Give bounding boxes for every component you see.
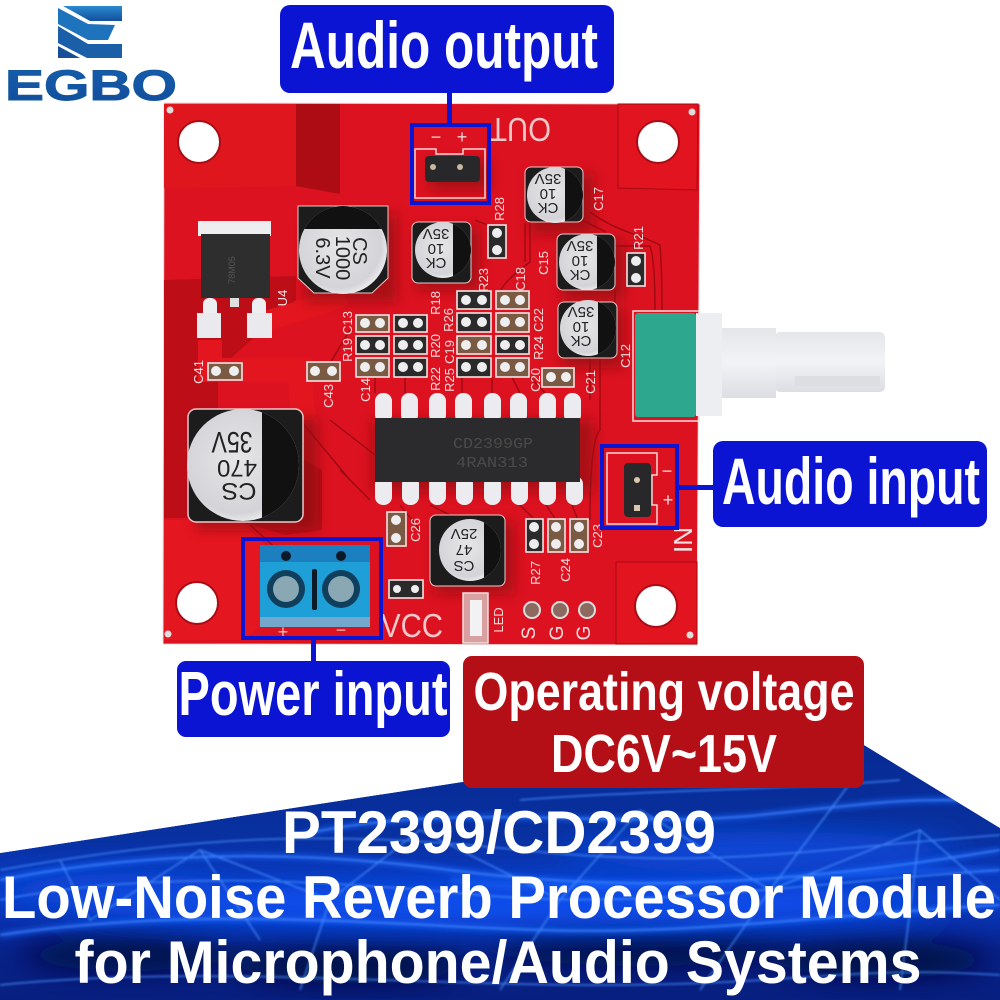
component: capacitor C17: 10 bbox=[540, 185, 556, 202]
mounting holes bbox=[176, 121, 679, 627]
callout: audio input bbox=[602, 441, 987, 528]
component: voltage regulator U4: 78M05 bbox=[227, 256, 237, 284]
silkscreen labels: C14 bbox=[358, 378, 373, 402]
silkscreen labels: − bbox=[662, 461, 672, 481]
component: capacitor CS 47 25V: 25V bbox=[451, 525, 477, 542]
title bbox=[2, 799, 996, 996]
silkscreen labels: C23 bbox=[590, 524, 605, 548]
silkscreen labels: C22 bbox=[531, 308, 546, 332]
silkscreen labels: C24 bbox=[558, 558, 573, 582]
callout: audio output bbox=[280, 5, 614, 203]
component shadows bbox=[196, 160, 624, 594]
silkscreen labels: − bbox=[336, 620, 346, 640]
callout: power input bbox=[177, 539, 450, 737]
silkscreen labels: + bbox=[278, 622, 288, 642]
component: capacitor C12: 35V bbox=[568, 303, 594, 320]
component: capacitor left bbox=[412, 222, 472, 284]
copper pour shading bbox=[164, 104, 698, 644]
silkscreen labels: R19 bbox=[340, 338, 355, 362]
component: CD2399GP chip: CD2399GP bbox=[453, 436, 533, 453]
silkscreen labels: R22 bbox=[428, 367, 443, 391]
component: capacitor C15: CK bbox=[570, 266, 590, 283]
silkscreen labels: R24 bbox=[531, 336, 546, 360]
silkscreen labels: U4 bbox=[275, 290, 290, 306]
silkscreen labels: R20 bbox=[428, 334, 443, 358]
logo: EGBO: EGBO bbox=[5, 62, 177, 110]
callout: audio output: Audio output bbox=[290, 8, 598, 82]
callout: power input: Power input bbox=[178, 660, 448, 729]
silkscreen labels: C43 bbox=[321, 384, 336, 408]
callout: operating voltage: Operating voltage bbox=[474, 662, 854, 722]
silkscreen labels: C20 bbox=[528, 368, 543, 392]
component: capacitor left: 10 bbox=[428, 240, 444, 257]
component: capacitor CS 1000 6.3V: 6.3V bbox=[311, 237, 333, 279]
silkscreen labels: G bbox=[547, 626, 568, 640]
component: capacitor C12 bbox=[558, 300, 618, 358]
component: capacitor C12: CK bbox=[571, 332, 591, 349]
silkscreen labels: S bbox=[519, 627, 540, 639]
panel: red PCB module bbox=[163, 103, 885, 645]
component: voltage regulator U4 bbox=[197, 221, 272, 338]
callout: operating voltage: DC6V~15V bbox=[551, 724, 777, 784]
silkscreen labels: G bbox=[574, 626, 595, 640]
component: capacitor C12: 10 bbox=[573, 318, 589, 335]
component: LED bbox=[463, 593, 488, 643]
silkscreen labels: + bbox=[663, 490, 673, 510]
silkscreen labels: R27 bbox=[528, 561, 543, 585]
component: capacitor C17: 35V bbox=[535, 170, 561, 187]
silkscreen labels: R21 bbox=[631, 226, 646, 250]
component: capacitor CS 47 25V bbox=[430, 515, 509, 586]
silkscreen labels: R28 bbox=[492, 197, 507, 221]
component: capacitor CS 470 35V: 470 bbox=[217, 454, 257, 481]
silkscreen labels: C41 bbox=[191, 360, 206, 384]
corner vias bbox=[164, 106, 696, 638]
component: capacitor C15 bbox=[556, 234, 616, 290]
title: PT2399/CD2399 bbox=[282, 799, 716, 866]
component: capacitor C15: 10 bbox=[572, 252, 588, 269]
silkscreen labels: R26 bbox=[441, 308, 456, 332]
silkscreen labels: + bbox=[457, 127, 467, 147]
callout: operating voltage bbox=[463, 656, 864, 788]
silkscreen labels: C19 bbox=[442, 340, 457, 364]
component: capacitor C15: 35V bbox=[567, 237, 593, 254]
silkscreen labels: R25 bbox=[442, 368, 457, 392]
silkscreen labels: C17 bbox=[591, 187, 606, 211]
silkscreen labels: VCC bbox=[381, 607, 443, 644]
component: SMD resistor and capacitor grid bbox=[208, 225, 645, 598]
title: for Microphone/Audio Systems bbox=[74, 929, 922, 996]
silkscreen labels bbox=[191, 111, 698, 644]
component: capacitor CS 1000 6.3V bbox=[298, 206, 389, 294]
component: capacitor CS 470 35V: CS bbox=[222, 477, 256, 504]
silkscreen labels: C26 bbox=[408, 518, 423, 542]
silkscreen labels: R23 bbox=[476, 268, 491, 292]
silkscreen labels: C18 bbox=[513, 267, 528, 291]
component: capacitor left: CK bbox=[426, 254, 446, 271]
pads: S G G bbox=[524, 602, 595, 618]
component: capacitor C17: CK bbox=[538, 199, 558, 216]
component: capacitor CS 47 25V: CS bbox=[454, 557, 474, 574]
component: CD2399GP chip bbox=[375, 393, 583, 505]
component: capacitor C17 bbox=[524, 166, 584, 223]
header pins: audio input bbox=[607, 453, 657, 524]
component: capacitor CS 470 35V bbox=[187, 408, 304, 523]
component: potentiometer with knob bbox=[633, 311, 885, 421]
silkscreen labels: R18 bbox=[428, 291, 443, 315]
silkscreen labels: OUT bbox=[489, 111, 551, 148]
component: capacitor CS 470 35V: 35V bbox=[212, 425, 252, 458]
silkscreen labels: IN bbox=[668, 527, 698, 553]
silkscreen labels: LED bbox=[491, 607, 506, 633]
component: capacitor CS 1000 6.3V: CS bbox=[348, 237, 370, 265]
component: capacitor left: 35V bbox=[423, 225, 449, 242]
silkscreen labels: C15 bbox=[536, 251, 551, 275]
logo: EGBO bbox=[5, 6, 177, 110]
component: capacitor CS 1000 6.3V: 1000 bbox=[331, 236, 353, 280]
silkscreen labels: − bbox=[431, 127, 441, 147]
component: blue screw terminal bbox=[260, 545, 370, 627]
background: blue network banner bbox=[0, 745, 1000, 1000]
header pins: audio output bbox=[415, 149, 485, 198]
silkscreen labels: C21 bbox=[583, 370, 598, 394]
silkscreen labels: C12 bbox=[618, 344, 633, 368]
silkscreen labels: C13 bbox=[340, 311, 355, 335]
component: CD2399GP chip: 4RAN313 bbox=[456, 455, 528, 472]
component: capacitor CS 47 25V: 47 bbox=[456, 541, 472, 558]
traces bbox=[250, 212, 662, 570]
